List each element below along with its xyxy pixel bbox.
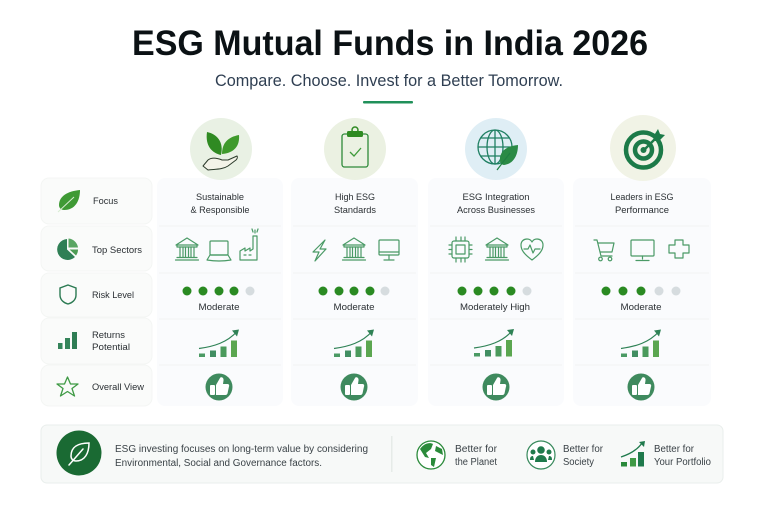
risk label: Moderate (198, 302, 240, 313)
icon: leaf badge (56, 430, 102, 476)
panel: column 2 High ESG Standards (291, 118, 418, 406)
focus text: Across Businesses (457, 205, 535, 216)
icons: top sectors (313, 238, 399, 261)
row label: Focus: Focus (93, 196, 118, 207)
focus text (457, 192, 535, 216)
icon: globe with leaf (465, 118, 527, 180)
panel: column 3 ESG Integration (428, 118, 564, 406)
benefit: portfolio: Better for (654, 444, 695, 455)
icon: target (610, 115, 676, 181)
title: ESG Mutual Funds in India 2026 (132, 24, 648, 63)
row label: Risk Level: Risk Level (92, 290, 134, 301)
focus text (610, 192, 674, 216)
panel: column 4 Leaders in ESG Performance (573, 115, 711, 406)
risk dots (602, 286, 680, 296)
focus text (334, 192, 376, 216)
benefit: planet: the Planet (455, 457, 497, 468)
benefit: society (527, 441, 604, 469)
focus text: High ESG (335, 192, 375, 203)
risk dots (318, 286, 390, 296)
panel: row labels (41, 178, 152, 406)
focus text: ESG Integration (462, 192, 530, 203)
summary text (115, 444, 368, 469)
row label: Overall View (41, 365, 152, 406)
returns chart (621, 330, 661, 357)
thumbs up (482, 374, 510, 400)
summary text: ESG investing focuses on long-term value by considering (115, 444, 368, 455)
icons: top sectors (176, 229, 258, 261)
risk label: Moderate (620, 302, 662, 313)
panel: bottom summary (41, 425, 723, 483)
focus text: & Responsible (190, 205, 250, 216)
row label: Returns Potential: Returns (92, 330, 125, 341)
returns chart (199, 330, 239, 357)
thumbs up (628, 374, 654, 400)
benefit: portfolio: Your Portfolio (654, 457, 712, 468)
icons: top sectors (594, 240, 689, 261)
focus text (190, 192, 250, 216)
thumbs up (340, 374, 368, 400)
risk dots (182, 286, 254, 296)
icon: clipboard (324, 118, 386, 180)
returns chart (474, 329, 514, 356)
thumbs up (206, 374, 232, 400)
row label: Returns Potential (41, 318, 152, 364)
benefit: society: Better for (563, 444, 604, 455)
focus text: Leaders in ESG (610, 192, 674, 203)
row label: Risk Level (41, 273, 152, 317)
focus text: Standards (334, 205, 376, 216)
benefit: planet (417, 441, 498, 469)
row label: Overall View: Overall View (92, 382, 144, 393)
focus text: Sustainable (196, 192, 244, 203)
row label: Top Sectors: Top Sectors (92, 245, 142, 256)
subtitle: Compare. Choose. Invest for a Better Tomorrow. (215, 72, 563, 90)
summary text: Environmental, Social and Governance factors. (115, 458, 322, 469)
risk label: Moderately High (460, 302, 530, 313)
benefit: portfolio (621, 441, 712, 468)
row label: Focus (41, 178, 152, 224)
focus text: Performance (615, 205, 669, 216)
risk label: Moderate (334, 302, 374, 313)
benefit: planet: Better for (455, 444, 498, 455)
row label: Top Sectors (41, 226, 152, 271)
returns chart (334, 330, 374, 357)
row label: Returns Potential: Potential (92, 342, 130, 353)
risk dots (458, 286, 532, 296)
title accent line (363, 101, 413, 104)
icons: top sectors (449, 237, 543, 262)
icon: hand with plant (190, 118, 252, 180)
benefit: society: Society (563, 457, 594, 468)
panel: column 1 Sustainable & Responsible (157, 118, 283, 406)
